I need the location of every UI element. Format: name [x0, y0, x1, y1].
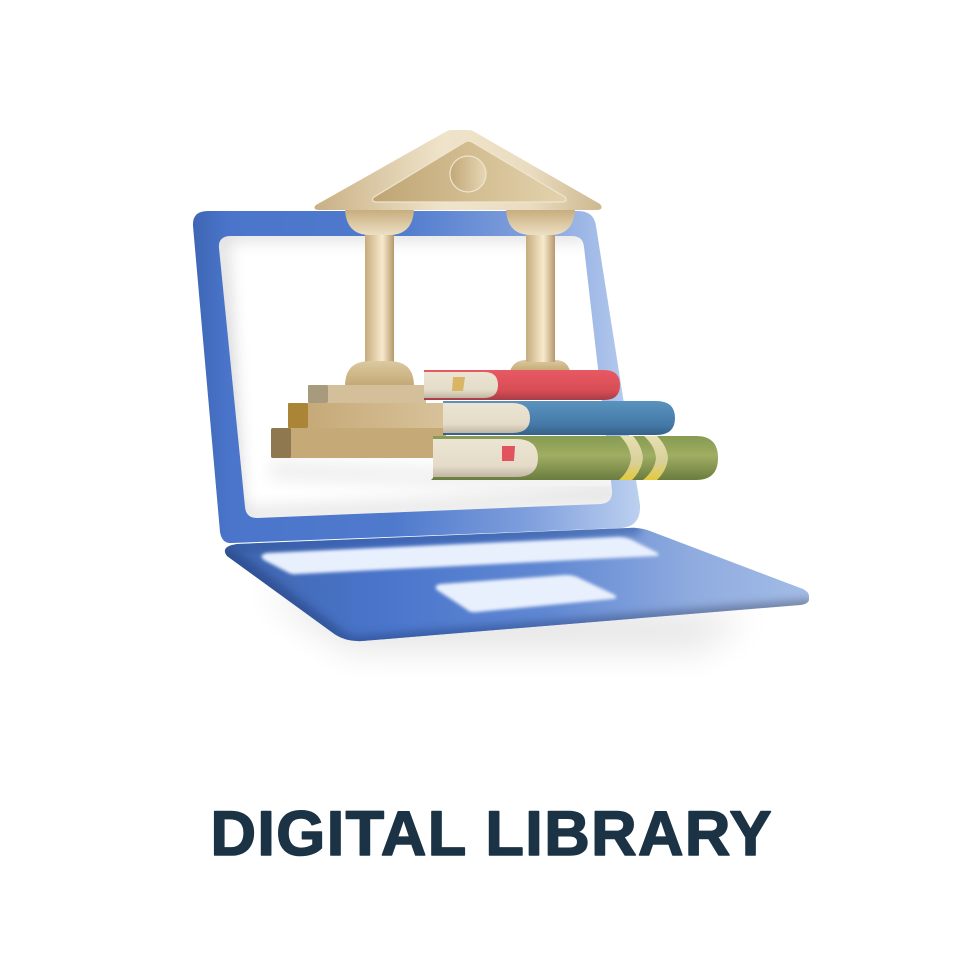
keyboard [262, 537, 659, 574]
trackpad [436, 575, 616, 612]
blue book [443, 401, 675, 435]
illustration canvas [192, 130, 809, 856]
left column [345, 209, 414, 386]
laptop lid [193, 211, 640, 543]
roof [314, 130, 602, 210]
laptop base [222, 528, 812, 643]
book stack [424, 370, 718, 480]
ground shadow [262, 590, 750, 650]
library building [271, 130, 602, 458]
pediment [372, 141, 566, 202]
red book [424, 370, 620, 400]
right column [506, 209, 575, 371]
green book [431, 436, 718, 480]
laptop screen [218, 236, 612, 518]
steps [271, 385, 446, 458]
laptop [193, 211, 812, 643]
title: DIGITAL LIBRARY [210, 799, 772, 869]
pediment medallion [450, 156, 486, 192]
